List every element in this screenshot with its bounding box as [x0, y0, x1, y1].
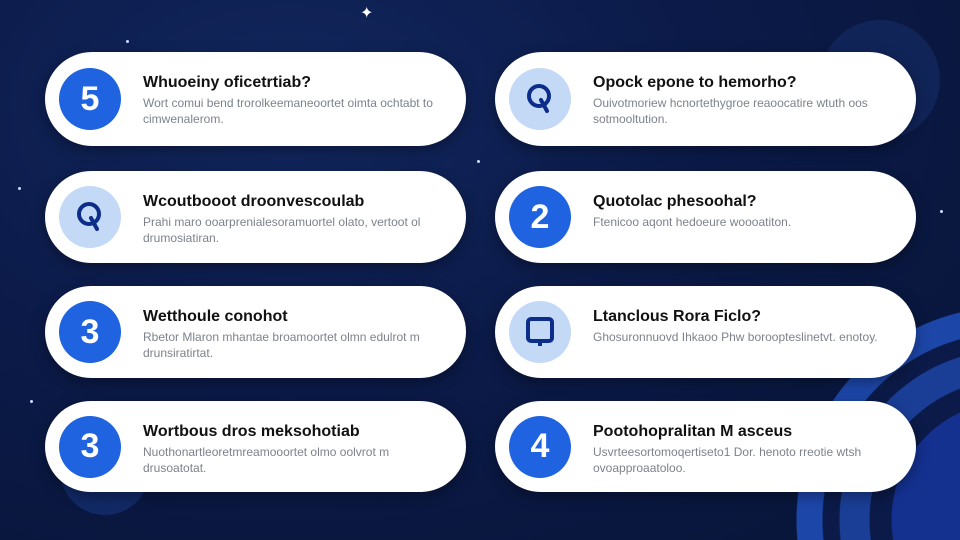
text: Ouivotmoriew hcnortethygroe reaoocatire wtuth oos sotmooltution.	[593, 96, 868, 126]
text: Rbetor Mlaron mhantae broamoortet olmn edulrot m drunsiratirtat.	[143, 330, 420, 360]
number 3	[59, 301, 121, 363]
heading: Opock epone to hemorho?	[593, 74, 797, 91]
sparkle: ✦	[360, 5, 373, 22]
card 5	[495, 52, 916, 146]
card 2	[45, 171, 466, 263]
decorative glow bottom left	[60, 425, 150, 515]
number 4: 4	[531, 427, 549, 465]
decorative rings bottom right	[760, 290, 960, 540]
heading: Quotolac phesoohal?	[593, 193, 757, 210]
number 2: 2	[531, 198, 549, 236]
number 3	[59, 416, 121, 478]
heading: Wcoutbooot droonvescoulab	[143, 193, 364, 210]
card 1	[45, 52, 466, 146]
heading: Ltanclous Rora Ficlo?	[593, 308, 761, 325]
text: Nuothonartleoretmreamooortet olmo oolvrot m drusoatotat.	[143, 445, 389, 475]
heading: Pootohopralitan M asceus	[593, 423, 792, 440]
icon: chat box	[509, 301, 571, 363]
heading: Whuoeiny oficetrtiab?	[143, 74, 311, 91]
icon: search	[509, 68, 571, 130]
number 3: 3	[81, 312, 99, 350]
number 5	[59, 68, 121, 130]
number 5: 5	[81, 80, 99, 118]
text: Wort comui bend trorolkeemaneoortet oimta ochtabt to cimwenalerom.	[143, 96, 433, 126]
number 2	[509, 186, 571, 248]
text: Usvrteesortomoqertiseto1 Dor. henoto rreotie wtsh ovoapproaatoloo.	[593, 445, 861, 475]
heading: Wortbous dros meksohotiab	[143, 423, 360, 440]
card 4	[45, 401, 466, 492]
number 4	[509, 416, 571, 478]
card 3	[45, 286, 466, 378]
text: Prahi maro ooarprenialesoramuortel olato, vertoot ol drumosiatiran.	[143, 215, 420, 245]
card 8	[495, 401, 916, 492]
number 3: 3	[81, 427, 99, 465]
text: Ftenicoo aqont hedoeure woooatiton.	[593, 215, 791, 229]
text: Ghosuronnuovd Ihkaoo Phw boroopteslinetvt. enotoy.	[593, 330, 878, 344]
decorative glow top right	[820, 20, 940, 140]
card 7	[495, 286, 916, 378]
card 6	[495, 171, 916, 263]
icon: search	[59, 186, 121, 248]
heading: Wetthoule conohot	[143, 308, 288, 325]
